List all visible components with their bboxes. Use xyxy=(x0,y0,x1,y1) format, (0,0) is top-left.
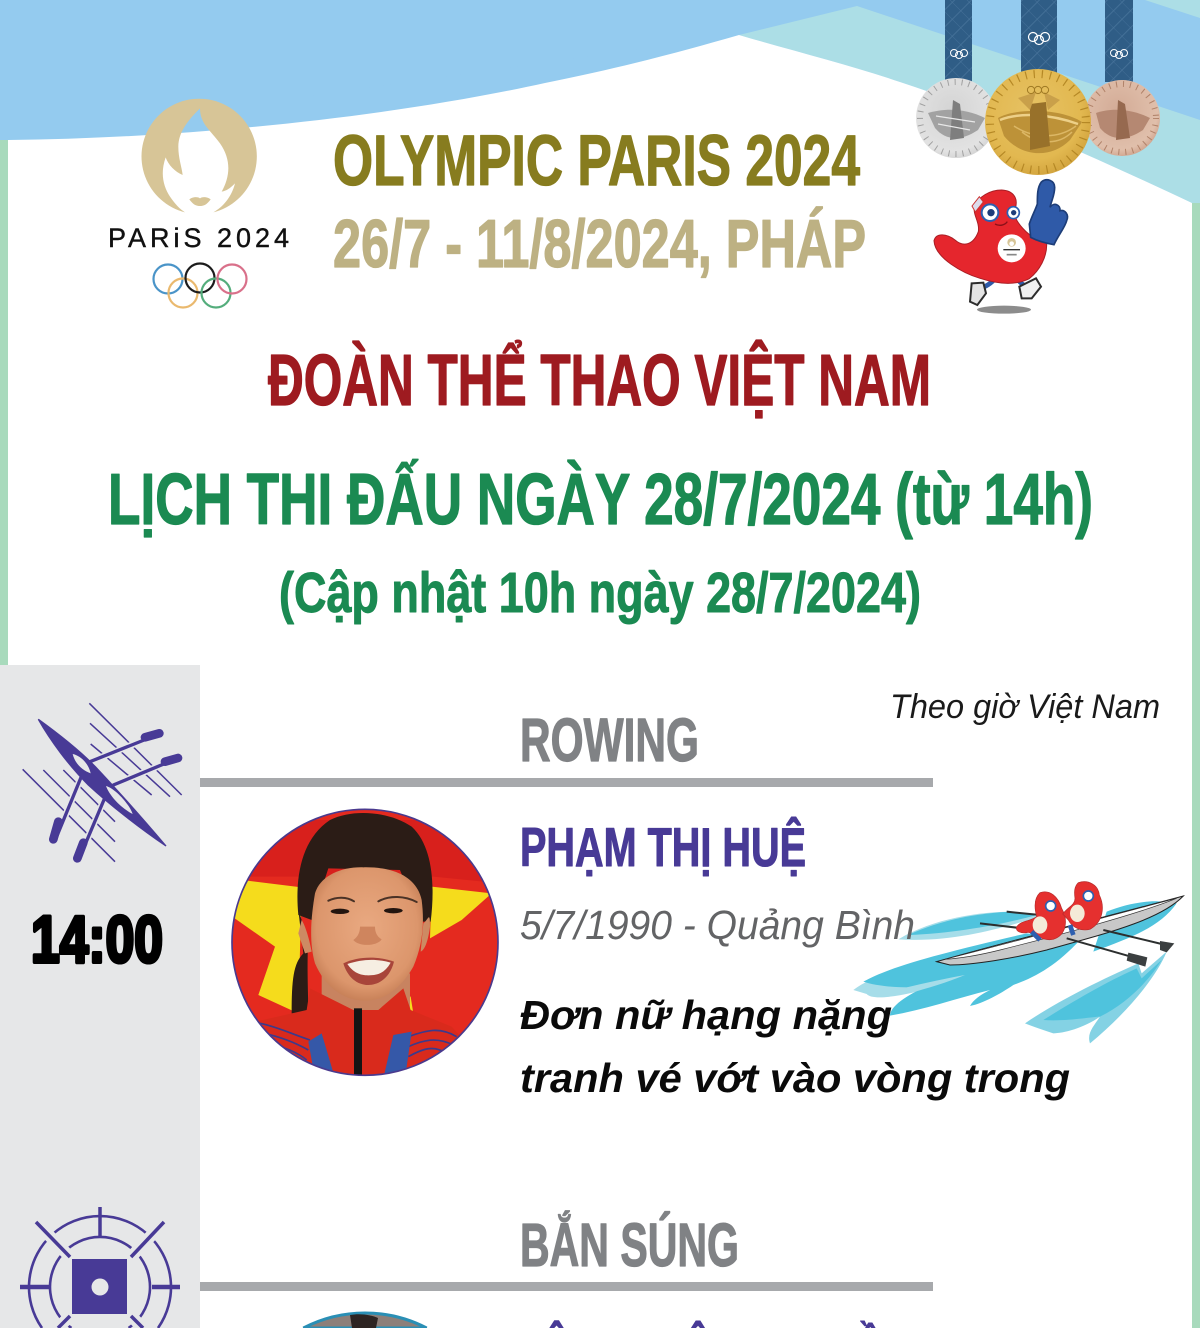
hull xyxy=(38,719,166,846)
panel: left time column xyxy=(0,665,200,1328)
heading: shooting: BẮN SÚNG xyxy=(520,1211,739,1279)
athlete photo: Phạm Thị Huệ xyxy=(227,803,503,1083)
Paris 2024 logo xyxy=(108,99,289,308)
heading: rowing: ROWING xyxy=(520,706,699,774)
event line 2: tranh vé vớt vào vòng trong xyxy=(520,1055,1070,1101)
section: shooting xyxy=(200,1211,933,1291)
rowing mascots xyxy=(1016,882,1102,940)
gold medal xyxy=(985,0,1091,175)
oars xyxy=(57,735,175,857)
mascot shadow xyxy=(977,306,1031,314)
update note: (Cập nhật 10h ngày 28/7/2024) xyxy=(279,561,921,625)
logo wordmark: PARiS 2024 xyxy=(108,223,289,253)
boat hull xyxy=(937,896,1183,965)
illustration: mascots rowing boat xyxy=(853,882,1183,1043)
water splashes xyxy=(853,901,1177,1043)
event line 1: Đơn nữ hạng nặng xyxy=(520,992,892,1038)
athlete name: Phạm Thị Huệ: PHẠM THỊ HUỆ xyxy=(520,816,806,878)
mascot body xyxy=(934,190,1047,283)
divider bar xyxy=(200,778,933,787)
mascot legs and shoes xyxy=(970,270,1041,305)
timezone note: Theo giờ Việt Nam xyxy=(890,688,1160,726)
oar blades xyxy=(53,733,178,858)
mascot belly logo xyxy=(998,234,1026,262)
athlete birth date and hometown: 5/7/1990 - Quảng Bình xyxy=(520,902,915,948)
divider bar xyxy=(200,1282,933,1291)
mascot eyes xyxy=(982,204,1019,225)
subtitle: dates and location: 26/7 - 11/8/2024, PHÁP xyxy=(333,206,866,282)
mascot blue glove xyxy=(1029,180,1067,245)
flame emblem xyxy=(141,99,257,212)
icon: rowing pictogram xyxy=(23,703,182,862)
olympic rings xyxy=(154,264,246,308)
title: Olympic Paris 2024: OLYMPIC PARIS 2024 xyxy=(333,122,860,201)
mascot cockade xyxy=(972,197,983,212)
silver medal xyxy=(916,0,996,158)
icon: shooting pictogram xyxy=(20,1207,180,1328)
event description xyxy=(520,992,1070,1101)
mascot Phryge xyxy=(934,180,1067,314)
water lines xyxy=(23,703,182,862)
medals xyxy=(916,0,1160,175)
oars xyxy=(980,912,1174,967)
section: rowing xyxy=(200,706,933,787)
bronze medal xyxy=(1084,0,1160,156)
time: 14:00: 14:00 xyxy=(31,902,163,976)
athlete photo: Lê Thị Mộng Tuyền xyxy=(303,1313,427,1328)
